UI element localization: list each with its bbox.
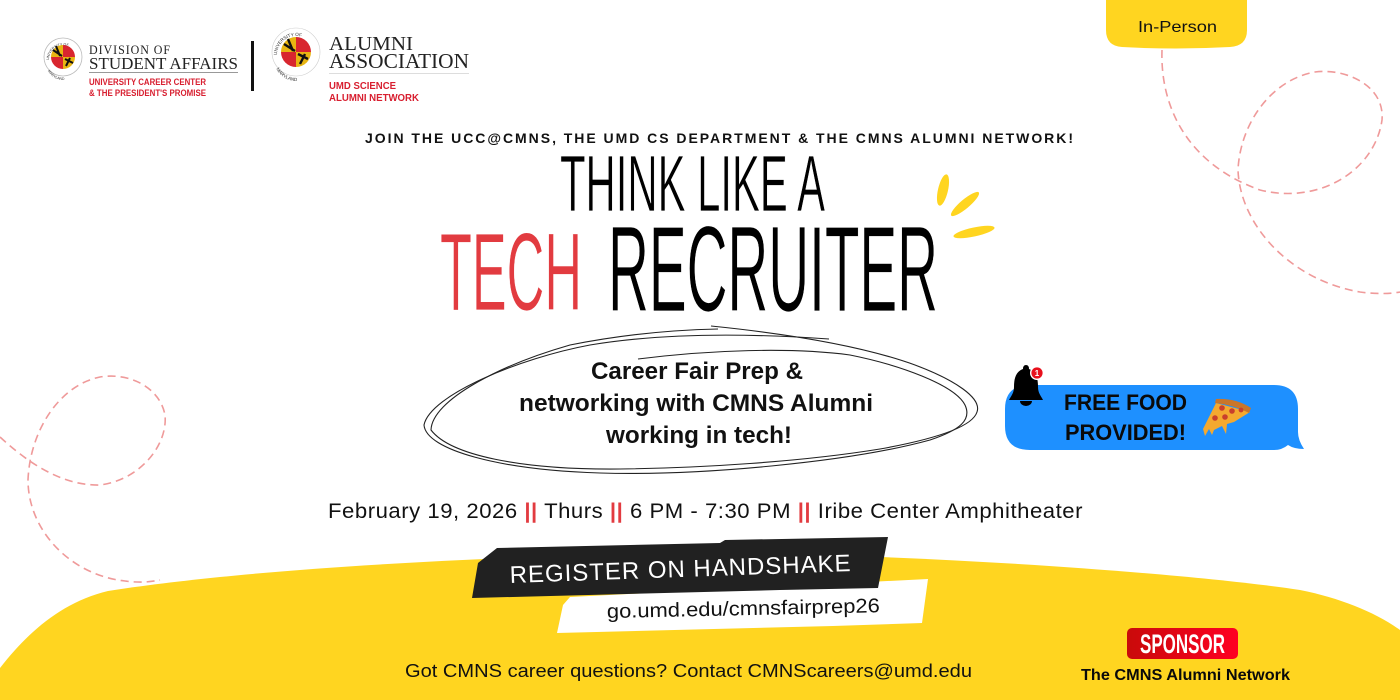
logo: alumni association: ALUMNI NETWORK — [329, 92, 419, 104]
logo: alumni association: ASSOCIATION — [329, 49, 469, 73]
seal: university of maryland — [44, 38, 82, 80]
contact line: Got CMNS career questions? Contact CMNScareers@umd.edu — [405, 660, 972, 681]
event description — [519, 358, 873, 449]
logo: division of student affairs: STUDENT AFFAIRS — [89, 54, 238, 73]
callout: free food: PROVIDED! — [1065, 420, 1186, 445]
event description: networking with CMNS Alumni — [519, 390, 873, 417]
register banner — [472, 537, 888, 598]
logo: division of student affairs: & THE PRESIDENT'S PROMISE — [89, 88, 206, 99]
seal: university of maryland: MARYLAND — [48, 70, 64, 80]
icon: bell: 1 — [1035, 369, 1040, 378]
callout: free food — [1005, 365, 1304, 450]
title line: think like a: THINK LIKE A — [560, 139, 825, 228]
eyebrow heading: JOIN THE UCC@CMNS, THE UMD CS DEPARTMENT & THE CMNS ALUMNI NETWORK! — [365, 130, 1073, 146]
dashed loop left — [0, 376, 165, 582]
event description: Career Fair Prep & — [591, 358, 803, 385]
logo: division of student affairs: UNIVERSITY CAREER CENTER — [89, 77, 206, 88]
tag: in-person: In-Person — [1138, 19, 1217, 36]
logo: alumni association: ALUMNI — [329, 33, 413, 55]
logo: alumni association: UMD SCIENCE — [329, 80, 396, 92]
scribbled ellipse — [424, 326, 978, 473]
sponsor badge — [1127, 628, 1238, 659]
white link banner — [557, 579, 928, 633]
yellow hill background — [0, 553, 1400, 700]
event details line: February 19, 2026 || Thurs || 6 PM - 7:30 PM || Iribe Center Amphitheater — [328, 500, 1083, 523]
dashed loop top right — [1162, 50, 1400, 294]
infographic canvas: RECRUITER — [608, 201, 938, 337]
event description: working in tech! — [605, 422, 792, 449]
infographic canvas: TECH — [440, 211, 582, 334]
sponsor block: The CMNS Alumni Network — [1081, 667, 1290, 684]
message bubble — [1005, 385, 1304, 450]
seal: university of maryland — [272, 28, 320, 81]
sponsor block — [1081, 628, 1290, 684]
logo divider — [251, 41, 254, 91]
yellow spark accents — [935, 173, 995, 241]
seal: university of maryland: UNIVERSITY OF — [46, 43, 69, 60]
sponsor badge: SPONSOR — [1140, 629, 1225, 659]
seal: university of maryland: MARYLAND — [276, 68, 297, 81]
seal: university of maryland: UNIVERSITY OF — [274, 32, 302, 55]
tag: in-person — [1106, 0, 1247, 48]
white link banner: go.umd.edu/cmnsfairprep26 — [607, 595, 880, 623]
callout: free food: FREE FOOD — [1064, 390, 1187, 415]
icon: bell — [1009, 365, 1044, 406]
icon: pizza — [1203, 399, 1251, 436]
logo: division of student affairs: DIVISION OF — [89, 43, 171, 57]
logo: alumni association — [272, 28, 469, 104]
register banner: REGISTER ON HANDSHAKE — [509, 550, 851, 589]
logo: division of student affairs — [44, 38, 238, 99]
